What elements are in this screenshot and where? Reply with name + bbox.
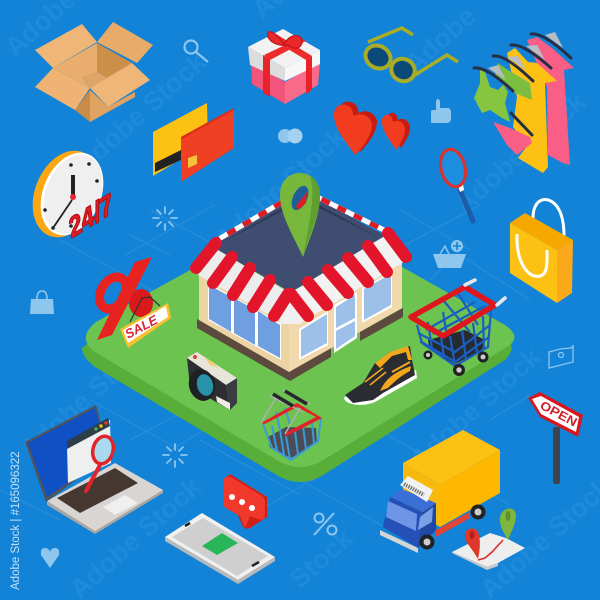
- camera: [185, 352, 237, 410]
- delivery truck: [380, 430, 500, 553]
- open sign: [528, 392, 583, 484]
- store awning: [196, 233, 406, 324]
- icon: map small: [549, 346, 573, 368]
- store walls: [199, 260, 402, 372]
- hangers: [474, 34, 571, 135]
- watermark: Adobe Stock: [449, 86, 592, 219]
- shopping cart: [411, 280, 505, 376]
- store base: [197, 308, 403, 381]
- watermark: Adobe: [399, 1, 481, 79]
- shopping bag: [510, 200, 573, 303]
- icon: thumb small: [431, 99, 451, 123]
- icon: bag small: [30, 291, 54, 314]
- gift box: [248, 29, 320, 104]
- sale sign: SALE: [122, 312, 160, 342]
- store right windows and door: [299, 272, 392, 360]
- location pin: [280, 173, 320, 257]
- magnifying glass: [437, 147, 473, 221]
- map with pins: [452, 508, 525, 570]
- chat bubble: [223, 474, 267, 529]
- credit cards: [153, 103, 234, 182]
- icon: spinner bottom: [163, 444, 187, 467]
- watermark: Adobe Stock: [14, 331, 157, 464]
- store roof: [211, 190, 393, 292]
- store left windows: [208, 283, 281, 360]
- icon: search small: [184, 40, 208, 62]
- sale sign: [120, 297, 171, 348]
- watermark: Stock: [284, 522, 359, 594]
- wall clock 24/7: [20, 141, 118, 247]
- icon: coins small: [278, 128, 302, 144]
- clothes on hangers: [474, 32, 574, 173]
- open sign: OPEN: [538, 398, 579, 429]
- stock id vertical text: Adobe Stock | #165096322: [10, 451, 22, 590]
- smartphone: [165, 513, 275, 584]
- laptop: [25, 405, 163, 534]
- percent sign: [94, 257, 153, 340]
- watermark: Adobe Stock: [209, 121, 352, 254]
- search window: [67, 418, 116, 491]
- icon: basket plus small: [433, 240, 466, 268]
- watermark: Adobe Stock: [404, 341, 547, 474]
- icon: percent small: [314, 513, 336, 535]
- sunglasses: [361, 28, 458, 86]
- wall clock 24/7: 24/7: [64, 187, 118, 244]
- green platform: [82, 212, 514, 482]
- store: [196, 173, 406, 381]
- hearts: [334, 102, 410, 155]
- shoe: [344, 346, 417, 405]
- icon: spinner top: [153, 207, 177, 230]
- cardboard box: [35, 22, 153, 122]
- watermark: Adobe Stock: [69, 46, 212, 179]
- shopping basket: [261, 390, 322, 460]
- icon: heart small: [41, 548, 59, 568]
